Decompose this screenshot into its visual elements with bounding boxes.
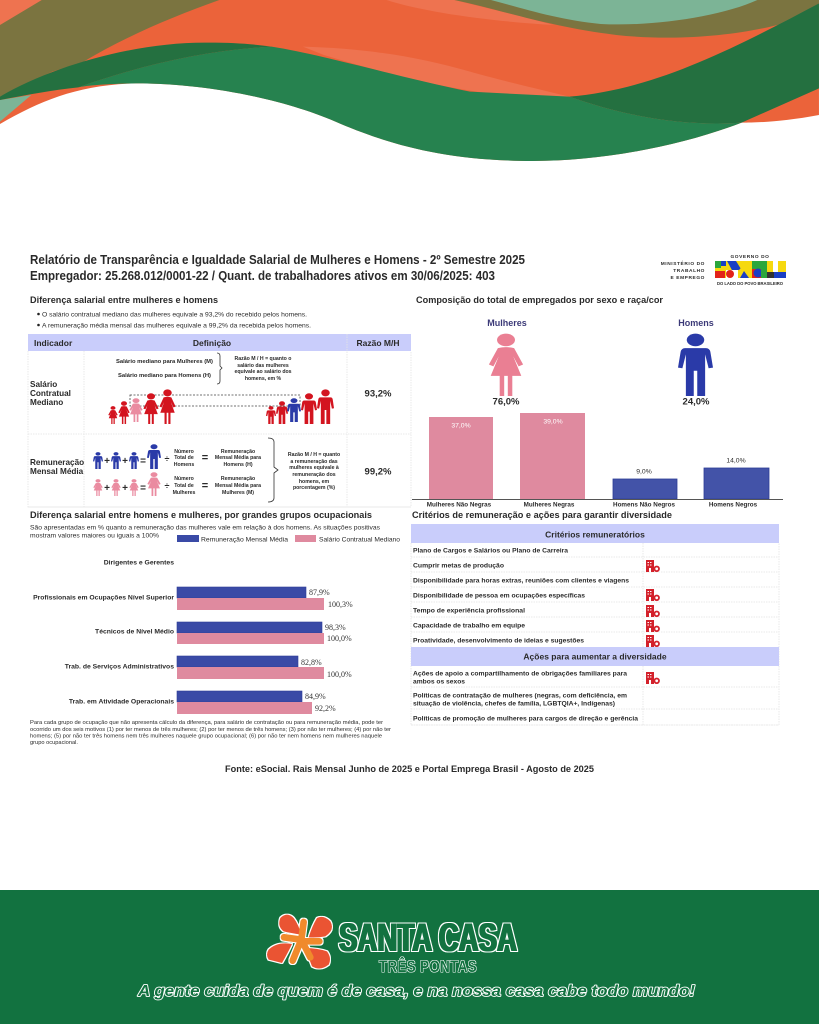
- description: São apresentadas em % quanto a remuneração das mulheres vale em relação à dos homens. As situações positivas: [30, 524, 381, 532]
- section heading: Diferença salarial entre homens e mulheres, por grandes grupos ocupacionais: [30, 510, 372, 521]
- action rows: Ações de apoio a compartilhamento de obrigações familiares para: [413, 670, 627, 678]
- women formula: Remuneração: [221, 476, 255, 482]
- description: mostram valores maiores ou iguais a 100%: [30, 532, 159, 540]
- header wave banner: [0, 0, 819, 161]
- men formula: [93, 444, 261, 469]
- women formula: Mulheres (M): [222, 490, 254, 496]
- row label: Salário: [30, 380, 57, 389]
- category labels: Trab. de Serviços Administrativos: [65, 664, 174, 670]
- footnote: [30, 720, 391, 746]
- icon: flower logo: [267, 915, 332, 968]
- women formula: +: [104, 483, 110, 494]
- ministry text: E EMPREGO: [671, 275, 705, 281]
- ratio value: 93,2%: [365, 388, 392, 400]
- row: remuneracao mensal media: [30, 438, 392, 502]
- government logos: [661, 254, 786, 286]
- value labels: 100,3%: [328, 600, 353, 609]
- men total: 24,0%: [683, 396, 710, 408]
- row label: [30, 380, 71, 407]
- definition labels: homens, em %: [245, 376, 282, 382]
- action check icon: [646, 672, 659, 684]
- women formula: +: [122, 483, 128, 494]
- women formula: =: [202, 480, 208, 492]
- brace and ratio note: a remuneração das: [290, 459, 338, 465]
- criteria rows: Tempo de experiência profissional: [413, 608, 525, 614]
- criteria rows: Plano de Cargos e Salários ou Plano de Carreira: [413, 548, 568, 554]
- women formula: Número: [174, 476, 194, 482]
- women total: Mulheres: [487, 318, 527, 328]
- men formula: +: [104, 456, 110, 467]
- header: acoes: [411, 647, 779, 666]
- description: [30, 524, 381, 540]
- report title: [30, 253, 525, 283]
- bar chart: sex and race: 39,0%: [543, 418, 563, 426]
- women formula: ÷: [165, 481, 170, 491]
- value labels: 84,9%: [305, 692, 326, 701]
- ministry text: MINISTÉRIO DO: [661, 259, 705, 267]
- governo do brasil mark: DO LADO DO POVO BRASILEIRO: [717, 281, 784, 286]
- governo do brasil mark: GOVERNO DO: [730, 254, 770, 260]
- bullet list: O salário contratual mediano das mulheres equivale a 93,2% do recebido pelos homens.: [42, 312, 307, 318]
- criteria rows: Disponibilidade para horas extras, reuniões com clientes e viagens: [413, 578, 629, 584]
- source line: Fonte: eSocial. Rais Mensal Junho de 2025 e Portal Emprega Brasil - Agosto de 2025: [225, 764, 594, 774]
- bar chart: sex and race: 9,0%: [636, 468, 652, 476]
- men formula: =: [140, 456, 146, 467]
- row label: Contratual: [30, 389, 71, 398]
- bullet list: [37, 312, 311, 330]
- bar chart: sex and race: Homens Negros: [709, 502, 758, 508]
- pictogram: women and men median: [108, 389, 334, 424]
- brace and ratio note: homens, em: [299, 479, 330, 485]
- bars: [177, 587, 324, 714]
- horizontal bar chart: [33, 560, 353, 714]
- report title: Empregador: 25.268.012/0001-22 / Quant. de trabalhadores ativos em 30/06/2025: 403: [30, 269, 495, 283]
- report title: Relatório de Transparência e Igualdade Salarial de Mulheres e Homens - 2º Semestre 2025: [30, 253, 525, 267]
- table header: Definição: [193, 338, 231, 348]
- bar chart: sex and race: Mulheres Negras: [524, 502, 575, 508]
- bullet list: A remuneração média mensal das mulheres equivale a 99,2% da recebida pelos homens.: [42, 322, 311, 330]
- brace and ratio note: remuneração dos: [292, 472, 336, 478]
- footer band: [0, 890, 819, 1024]
- category labels: Profissionais em Ocupações Nível Superior: [33, 594, 174, 602]
- section heading: Critérios de remuneração e ações para garantir diversidade: [412, 510, 672, 521]
- men formula: Total de: [174, 455, 194, 461]
- category labels: Trab. em Atividade Operacionais: [69, 698, 174, 706]
- men total: Homens: [678, 318, 714, 328]
- women total: [487, 318, 527, 408]
- brace and ratio note: mulheres equivale à: [289, 465, 339, 471]
- men formula: =: [202, 452, 208, 464]
- panel: indicator table: [28, 334, 411, 507]
- category labels: Dirigentes e Gerentes: [104, 560, 174, 566]
- row label: Mediano: [30, 398, 63, 407]
- criteria rows: Proatividade, desenvolvimento de ideias e sugestões: [413, 638, 584, 644]
- legend: Salário Contratual Mediano: [319, 536, 400, 544]
- criteria rows: Disponibilidade de pessoa em ocupações específicas: [413, 592, 585, 600]
- bar chart: sex and race: 37,0%: [451, 422, 471, 430]
- definition labels: [116, 353, 292, 384]
- tagline: A gente cuida de quem é de casa, e na nossa casa cabe todo mundo!: [137, 983, 696, 1000]
- men formula: Mensal Média para: [215, 455, 261, 461]
- criteria rows: [413, 548, 629, 644]
- bar chart: sex and race: Homens Não Negros: [613, 502, 675, 508]
- ratio value: 99,2%: [365, 466, 392, 478]
- legend: [177, 535, 400, 544]
- women formula: =: [140, 483, 146, 494]
- section heading: Diferença salarial entre mulheres e homens: [30, 295, 218, 306]
- criteria check icons: [646, 560, 659, 647]
- footnote: homens; (5) por não ter três homens nem três mulheres naquele grupo ocupacional; (6) por não ter nem homens nem mulheres naquele: [30, 734, 382, 740]
- women formula: Mensal Média para: [215, 483, 261, 489]
- section heading: Composição do total de empregados por sexo e raça/cor: [416, 295, 663, 306]
- definition labels: salário das mulheres: [237, 363, 289, 369]
- header: criterios remuneratorios: [411, 524, 779, 543]
- value labels: 100,0%: [327, 670, 352, 679]
- definition labels: equivale ao salário dos: [234, 369, 292, 375]
- ministry text: TRABALHO: [673, 268, 705, 274]
- action rows: Políticas de contratação de mulheres (negras, com deficiência, em: [413, 692, 627, 700]
- category labels: Técnicos de Nível Médio: [95, 628, 174, 636]
- header: criterios remuneratorios: Critérios remuneratórios: [545, 530, 645, 540]
- legend: Remuneração Mensal Média: [201, 536, 288, 544]
- row label: [30, 458, 84, 476]
- bar chart: sex and race: 14,0%: [726, 458, 746, 464]
- brace and ratio note: porcentagem (%): [293, 485, 335, 491]
- value labels: 100,0%: [327, 634, 352, 643]
- header: acoes: Ações para aumentar a diversidade: [523, 652, 667, 662]
- bar chart: sex and race: Mulheres Não Negras: [427, 502, 492, 508]
- women formula: Mulheres: [173, 490, 195, 496]
- action rows: ambos os sexos: [413, 678, 465, 686]
- criteria rows: Capacidade de trabalho em equipe: [413, 622, 525, 630]
- panel: criteria table: [411, 510, 779, 725]
- men formula: Número: [174, 449, 194, 455]
- panel: workforce composition: [412, 295, 783, 508]
- men formula: +: [122, 456, 128, 467]
- men total: [678, 318, 714, 408]
- panel: occupational groups chart: [30, 510, 400, 746]
- ministry text: [661, 259, 705, 281]
- men formula: Remuneração: [221, 449, 255, 455]
- table header: Razão M/H: [357, 338, 399, 348]
- action rows: [413, 670, 638, 722]
- footnote: ocorrido um dos seis motivos (1) por ter menos de três mulheres; (2) por ter menos de três homens; (3) por não ter mulheres; (4) por não ter: [30, 727, 391, 733]
- men formula: Homens (H): [223, 462, 253, 468]
- men formula: Homens: [174, 462, 194, 468]
- bar chart: sex and race: [412, 413, 783, 508]
- governo do brasil mark: [715, 254, 786, 286]
- logo wordmark: SANTA CASA: [339, 916, 517, 960]
- action rows: situação de violência, chefes de família, LGBTQIA+, Indígenas): [413, 700, 615, 708]
- value labels: 82,8%: [301, 658, 322, 667]
- section: wage gap summary: [30, 295, 311, 330]
- brace and ratio note: Razão M / H = quanto: [288, 452, 340, 458]
- men formula: ÷: [165, 454, 170, 464]
- action rows: Políticas de promoção de mulheres para cargos de direção e gerência: [413, 716, 638, 722]
- row: salario contratual mediano: [30, 353, 392, 424]
- definition labels: Salário mediano para Homens (H): [118, 373, 211, 379]
- table header: [28, 334, 411, 351]
- women formula: Total de: [174, 483, 194, 489]
- logo wordmark: [339, 916, 517, 976]
- row label: Remuneração: [30, 458, 84, 467]
- footnote: Para cada grupo de ocupação que não apresenta cálculo da diferença, para salário de contratação ou para remuneração média, pode ter: [30, 720, 383, 726]
- value labels: 98,3%: [325, 623, 346, 632]
- table header: Indicador: [34, 338, 73, 348]
- brace and ratio note: [268, 438, 340, 502]
- category labels: [33, 560, 174, 706]
- logo wordmark: TRÊS PONTAS: [379, 957, 477, 976]
- value labels: 92,2%: [315, 704, 336, 713]
- women total: 76,0%: [493, 396, 520, 408]
- footnote: grupo ocupacional.: [30, 740, 78, 746]
- value labels: 87,9%: [309, 588, 330, 597]
- definition labels: Razão M / H = quanto o: [235, 356, 291, 362]
- row label: Mensal Média: [30, 467, 84, 476]
- definition labels: Salário mediano para Mulheres (M): [116, 359, 213, 365]
- value labels: [301, 588, 353, 713]
- women formula: [93, 472, 261, 496]
- criteria rows: Cumprir metas de produção: [413, 562, 504, 570]
